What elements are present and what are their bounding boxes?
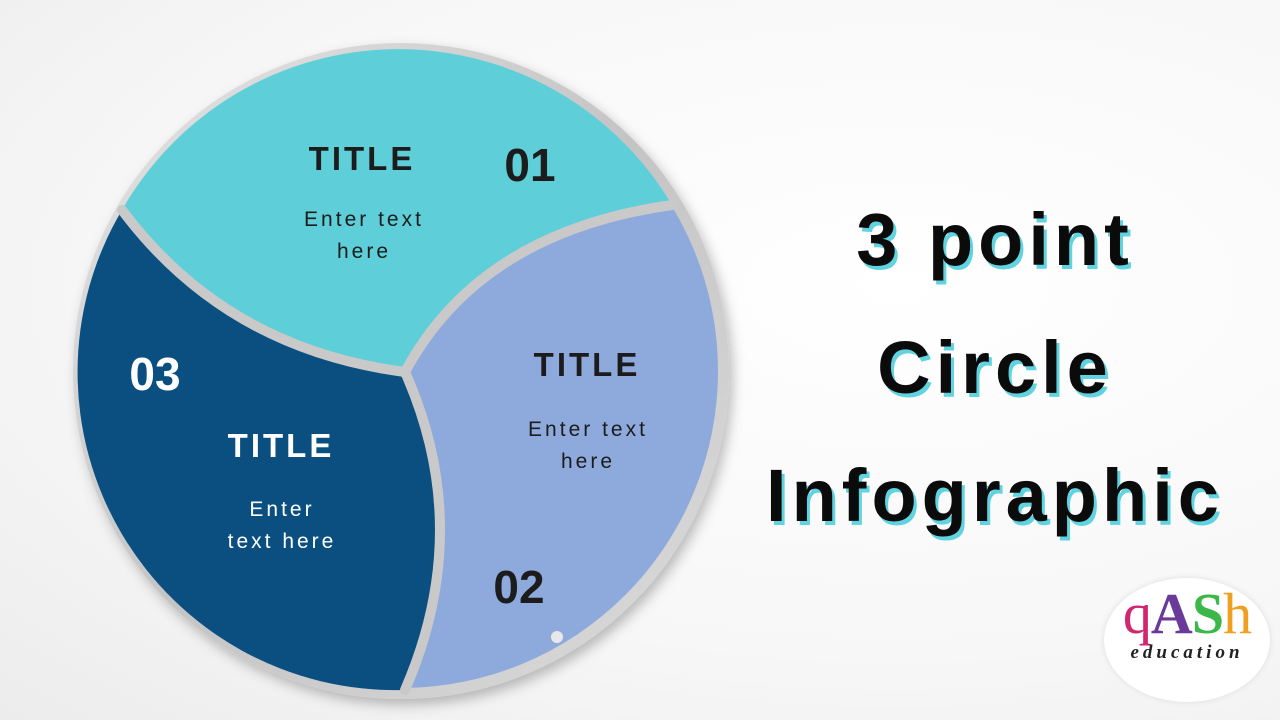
logo: qASh [1123,581,1251,646]
segment 01 text: 01 [504,139,556,191]
segment 03 text: text here [228,530,336,553]
heading line 1: 3 point [856,198,1134,281]
logo [1104,578,1270,702]
segment 01 text: Enter text [304,208,424,231]
segment 01 text: TITLE [309,140,415,177]
segment 03 text [129,348,336,553]
segment 02 text: 02 [493,561,545,613]
dividers [122,205,672,690]
segment 01 teal [122,49,672,372]
segment 03 text: 03 [129,348,181,400]
segment 02 text: TITLE [534,346,640,383]
logo: education [1130,642,1244,663]
segment 01 text [304,139,556,263]
segment 02 text: Enter text [528,418,648,441]
segment 01 text: here [337,240,391,263]
heading line 2: Circle [877,326,1113,409]
heading line 3: Infographic [766,454,1224,537]
segment 03 text: Enter [249,498,315,521]
outer ring [73,43,729,699]
segment 02 text: here [561,450,615,473]
segment 02 light blue [84,54,718,688]
segment 03 text: TITLE [228,427,334,464]
segment 03 dark blue [78,210,440,690]
segment 02 text [493,346,648,613]
